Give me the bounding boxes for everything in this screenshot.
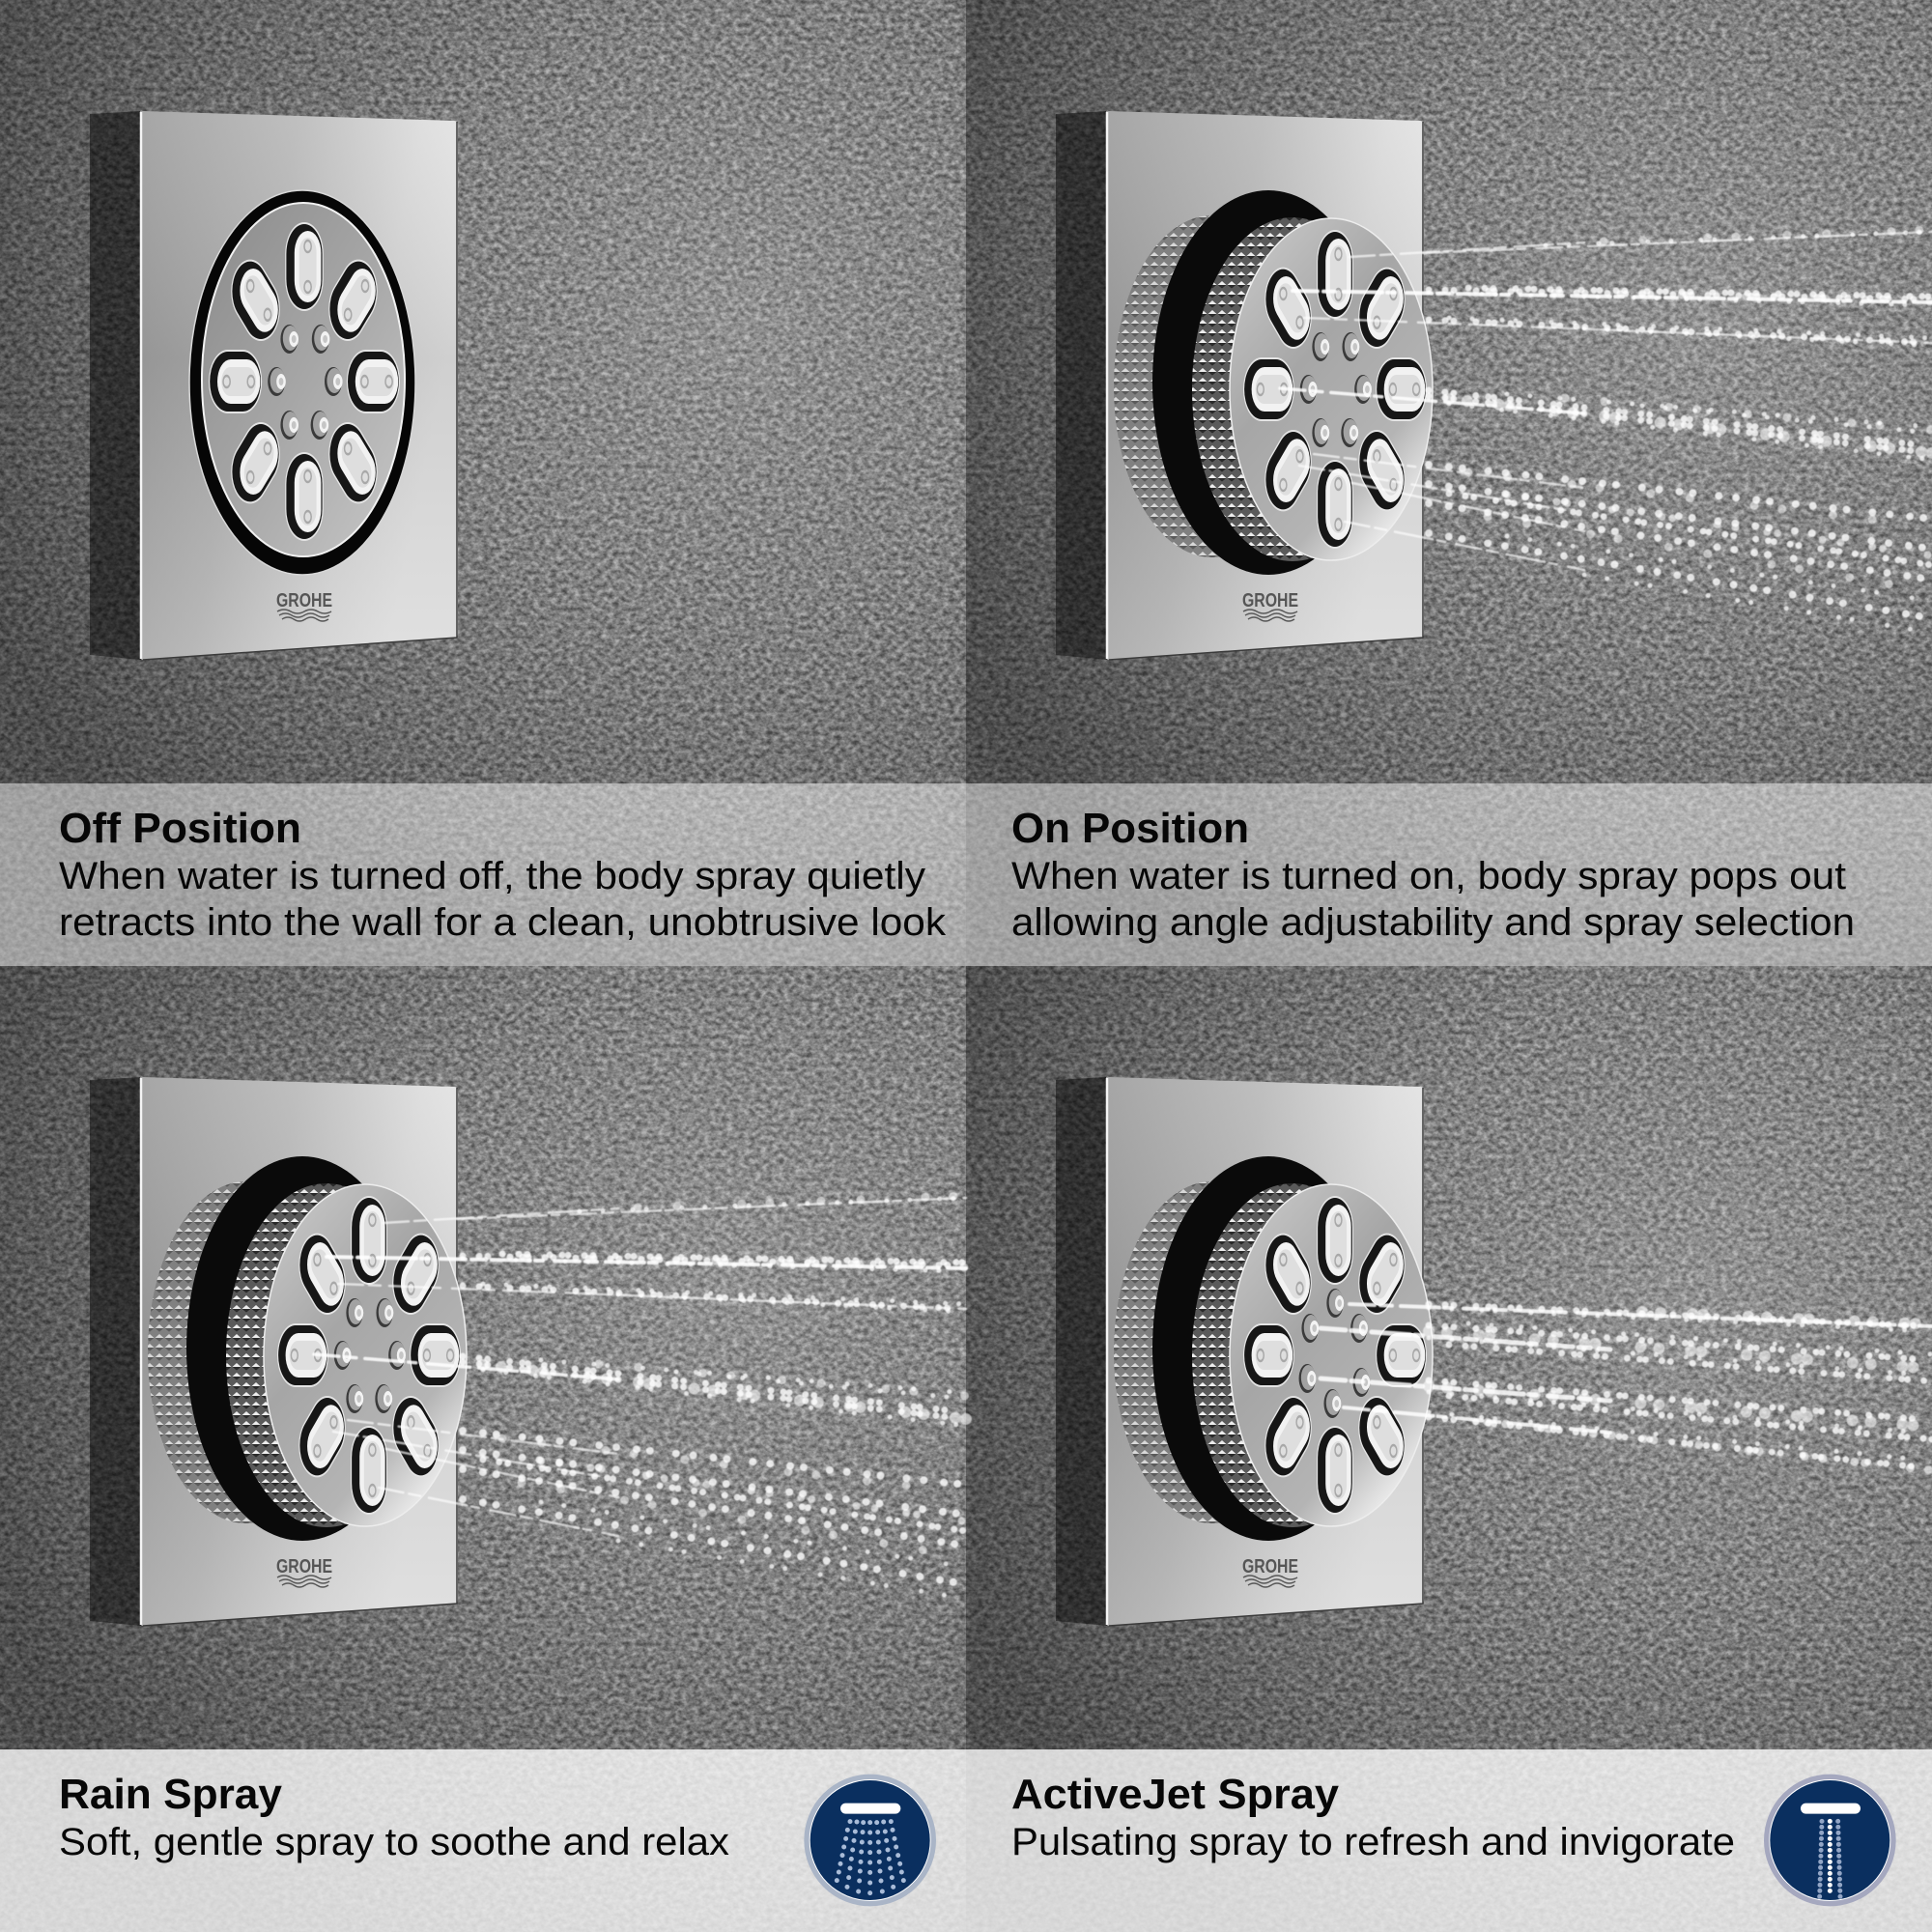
panel: on position	[966, 111, 1932, 966]
device: retracted body spray	[140, 111, 458, 660]
heading: activejet spray: ActiveJet Spray	[1011, 1771, 1340, 1818]
caption band: on position	[966, 783, 1932, 966]
device: extended body spray with rain jets	[1106, 111, 1932, 660]
description: activejet spray: Pulsating spray to refresh and invigorate	[1011, 1821, 1735, 1863]
caption band: off position	[0, 783, 966, 966]
plate logo	[276, 590, 332, 621]
panel: off position	[0, 111, 966, 966]
plate logo: GROHE	[1242, 590, 1298, 611]
plate logo: GROHE	[276, 590, 332, 611]
caption band: activejet spray	[966, 1749, 1932, 1932]
heading: rain spray: Rain Spray	[59, 1771, 283, 1818]
heading: off position: Off Position	[59, 805, 301, 852]
description: on position: When water is turned on, body spray pops out	[1011, 855, 1846, 897]
device: body spray in ActiveJet mode	[1106, 1077, 1932, 1626]
description: rain spray: Soft, gentle spray to soothe and relax	[59, 1821, 729, 1863]
panel: activejet spray	[966, 1077, 1932, 1932]
description: on position: allowing angle adjustability and spray selection	[1011, 901, 1855, 944]
heading: on position: On Position	[1011, 805, 1249, 852]
description: off position: retracts into the wall for a clean, unobtrusive look	[59, 901, 947, 944]
panel: rain spray	[0, 1077, 966, 1932]
icon: rain spray	[807, 1776, 933, 1904]
plate logo	[276, 1556, 332, 1587]
plate logo	[1242, 590, 1298, 621]
device: body spray in rain mode	[140, 1077, 966, 1626]
plate logo	[1242, 1556, 1298, 1587]
plate logo: GROHE	[1242, 1556, 1298, 1577]
plate logo: GROHE	[276, 1556, 332, 1577]
icon: activejet spray	[1767, 1776, 1893, 1904]
description: off position: When water is turned off, the body spray quietly	[59, 855, 925, 897]
caption band: rain spray	[0, 1749, 966, 1932]
